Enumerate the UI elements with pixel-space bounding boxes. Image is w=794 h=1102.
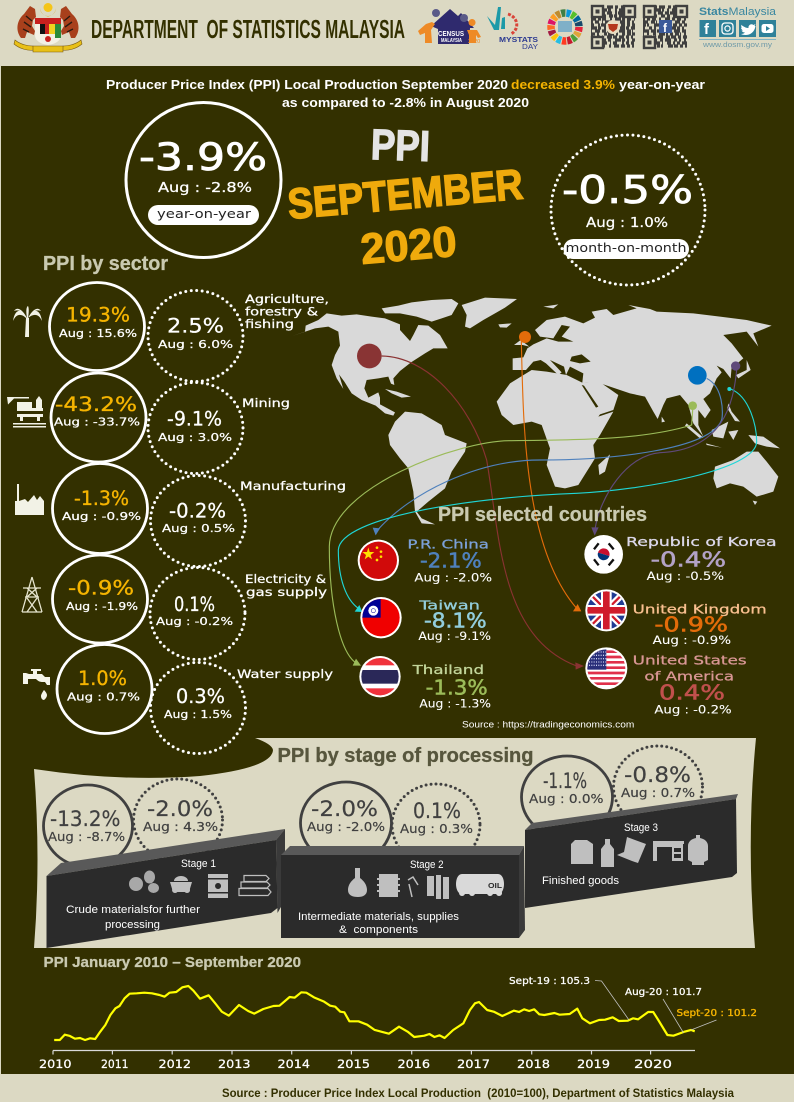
chart callouts: Sept-19 : 105.3 bbox=[509, 976, 590, 987]
stage 2 circles: Aug : 0.3% bbox=[400, 822, 473, 836]
sector: water supply: 0.3% bbox=[176, 685, 225, 708]
sector: agriculture: Aug : 6.0% bbox=[158, 338, 233, 351]
sector: mining bbox=[7, 373, 290, 474]
sector: agriculture bbox=[13, 282, 329, 382]
chart year labels: 2015 bbox=[337, 1057, 370, 1071]
country: Republic of Korea bbox=[584, 535, 777, 583]
chart axis bbox=[53, 1050, 695, 1054]
country: United States of America: United States bbox=[633, 654, 747, 668]
chart year labels: 2020 bbox=[634, 1057, 672, 1071]
icon: oil tanker bbox=[456, 874, 504, 896]
country connectors and markers bbox=[329, 331, 757, 670]
country: Thailand bbox=[359, 656, 491, 711]
chart callouts: Aug-20 : 101.7 bbox=[625, 987, 702, 998]
countries bbox=[357, 535, 777, 730]
summary text bbox=[106, 78, 705, 110]
month-on-month circle: month-on-month bbox=[566, 241, 686, 255]
icon: barrel bands bbox=[208, 878, 228, 894]
sector: agriculture: 19.3% bbox=[66, 304, 130, 327]
stage 3 circles bbox=[522, 746, 702, 838]
chart year labels: 2013 bbox=[218, 1057, 250, 1071]
icon: barrel bbox=[208, 874, 228, 898]
country: United Kingdom: -0.9% bbox=[654, 613, 728, 637]
country: Thailand: -1.3% bbox=[426, 675, 488, 699]
Old World islands bbox=[498, 304, 780, 475]
Africa and Arabia bbox=[497, 370, 618, 488]
world map: Australia bbox=[713, 452, 778, 505]
heading: PPI January 2010 - September 2020: PPI January 2010 – September 2020 bbox=[44, 954, 301, 971]
country: United States of America: Aug : -0.2% bbox=[654, 702, 732, 716]
StatsMalaysia social block: f bbox=[704, 21, 710, 38]
icon: logs bbox=[239, 876, 271, 896]
sector: manufacturing: -1.3% bbox=[74, 487, 129, 510]
world map: Americas bbox=[292, 298, 517, 524]
year-on-year circle bbox=[126, 102, 281, 258]
sector: mining: -9.1% bbox=[167, 408, 222, 431]
chart callouts: Sept-20 : 101.2 bbox=[676, 1008, 757, 1019]
sector: manufacturing: -0.2% bbox=[169, 500, 226, 523]
Eurasia bbox=[513, 305, 772, 437]
year-on-year circle: -3.9% bbox=[139, 136, 267, 179]
title: PPI September 2020 bbox=[286, 121, 525, 274]
connector: United Kingdom bbox=[519, 331, 581, 611]
icon: coat of arms of Malaysia bbox=[14, 3, 82, 52]
icon: MyStats Day logo bbox=[487, 7, 538, 51]
month-on-month circle bbox=[551, 135, 705, 285]
stage 3 circles: -0.8% bbox=[624, 763, 691, 787]
sector: mining: Mining bbox=[242, 396, 290, 410]
sector panel bbox=[7, 282, 346, 754]
icon: factory bbox=[15, 484, 44, 515]
icon: jerry can bbox=[571, 840, 593, 864]
sector: mining: Aug : 3.0% bbox=[158, 431, 232, 444]
header band bbox=[14, 3, 777, 52]
country: United States of America: 0.4% bbox=[659, 680, 725, 704]
heading: department name: DEPARTMENT OF STATISTICS MALAYSIA bbox=[91, 14, 405, 44]
icon: census 2020 logo bbox=[418, 9, 481, 45]
sector: electricity and gas: 0.1% bbox=[174, 593, 215, 616]
stage 2 block: Stage 2 bbox=[410, 859, 444, 871]
icon: SDG wheel bbox=[551, 13, 579, 41]
North America bbox=[292, 313, 448, 416]
stage 1 circles: -2.0% bbox=[147, 797, 213, 821]
stage 1 block bbox=[46, 829, 285, 948]
country: P.R. China: -2.1% bbox=[420, 548, 482, 572]
icon: desk bbox=[653, 841, 684, 861]
sector: agriculture: Agriculture, bbox=[245, 292, 329, 306]
icon: minerals bbox=[129, 870, 159, 893]
panel: stage of processing background bbox=[34, 738, 756, 948]
South America bbox=[388, 412, 467, 524]
sector: water supply: Aug : 1.5% bbox=[164, 708, 232, 721]
stage 1 circles bbox=[44, 779, 222, 867]
chart year labels: 2017 bbox=[457, 1057, 490, 1071]
summary text: decreased 3.9% bbox=[511, 78, 615, 92]
heading: PPI by sector: PPI by sector bbox=[43, 253, 168, 275]
country: Taiwan: -8.1% bbox=[424, 608, 487, 632]
connector: United States bbox=[357, 344, 584, 670]
heading: PPI selected countries: PPI selected countries bbox=[438, 504, 647, 526]
sector: electricity and gas: -0.9% bbox=[68, 576, 134, 599]
heading: PPI by stage of processing: PPI by stage of processing bbox=[278, 745, 534, 767]
stage 1 block: Stage 1 bbox=[181, 858, 216, 870]
summary text: Producer Price Index (PPI) Local Production September 2020 bbox=[106, 78, 508, 92]
connector: Korea bbox=[591, 361, 740, 536]
stage 3 block: Finished goods bbox=[542, 875, 620, 887]
connector: China bbox=[373, 366, 722, 535]
chart year labels: 2011 bbox=[101, 1057, 128, 1071]
Arctic islands, Greenland and Caribbean bbox=[382, 298, 517, 398]
chart series line bbox=[54, 986, 695, 1040]
chart year labels: 2019 bbox=[577, 1057, 610, 1071]
icon: chip bbox=[377, 874, 400, 897]
sector: electricity and gas: gas supply bbox=[246, 585, 327, 599]
StatsMalaysia social block bbox=[699, 6, 777, 49]
month-on-month circle: Aug : 1.0% bbox=[586, 215, 668, 231]
sector: water supply: Aug : 0.7% bbox=[67, 691, 140, 704]
country: P.R. China bbox=[357, 537, 492, 585]
chart year labels: 2012 bbox=[158, 1057, 191, 1071]
stage 1 block: Crude materialsfor further bbox=[66, 904, 200, 916]
sector: agriculture: Aug : 15.6% bbox=[59, 327, 137, 340]
stage 1 circles: Aug : 4.3% bbox=[143, 820, 218, 834]
stage 2 block: OIL bbox=[488, 881, 502, 890]
icon: water tap bbox=[23, 669, 50, 700]
icon: bottle bbox=[601, 839, 614, 867]
country: Thailand: Aug : -1.3% bbox=[419, 697, 491, 711]
country: United Kingdom: United Kingdom bbox=[633, 602, 767, 616]
sector: manufacturing: Aug : -0.9% bbox=[62, 510, 141, 523]
sector: electricity and gas: Aug : -1.9% bbox=[66, 600, 138, 613]
chart year labels: 2018 bbox=[517, 1057, 550, 1071]
StatsMalaysia social block: StatsMalaysia bbox=[699, 6, 777, 18]
sector: electricity and gas: Aug : -0.2% bbox=[156, 615, 233, 628]
stage 1 circles: Aug : -8.7% bbox=[48, 830, 125, 844]
summary text: as compared to -2.8% in August 2020 bbox=[282, 96, 529, 110]
chart year labels: 2010 bbox=[39, 1057, 72, 1071]
line chart: PPI 2010-2020 bbox=[39, 976, 757, 1071]
icon: MyStats Day logo: DAY bbox=[522, 42, 538, 51]
sector: manufacturing bbox=[15, 464, 346, 566]
country: Taiwan bbox=[360, 597, 491, 643]
title: PPI September 2020: PPI bbox=[370, 121, 431, 171]
chart year labels bbox=[39, 1057, 672, 1071]
stage 3 circles: Aug : 0.0% bbox=[529, 792, 604, 806]
sector: manufacturing: Aug : 0.5% bbox=[162, 522, 235, 535]
connector: Taiwan bbox=[338, 387, 757, 612]
sector: water supply bbox=[23, 644, 333, 754]
sector: mining: -43.2% bbox=[55, 393, 137, 416]
country: United Kingdom: Aug : -0.9% bbox=[653, 633, 731, 647]
sector: manufacturing: Manufacturing bbox=[240, 479, 346, 493]
country: Republic of Korea: Republic of Korea bbox=[626, 535, 777, 549]
icon: census 2020 logo: 2020 bbox=[468, 39, 480, 45]
stage 1 block: processing bbox=[105, 919, 160, 931]
icon: transmission tower bbox=[22, 577, 42, 612]
country: United States of America bbox=[585, 647, 747, 716]
icon: census 2020 logo: MALAYSIA bbox=[441, 38, 462, 44]
stage 3 block bbox=[525, 794, 738, 908]
stage 3 block: Stage 3 bbox=[624, 822, 658, 834]
source: trading economics: Source : https://tradingeconomics.com bbox=[462, 720, 635, 730]
country: Thailand: Thailand bbox=[411, 663, 484, 677]
chart callouts bbox=[509, 976, 757, 1033]
StatsMalaysia social block: www.dosm.gov.my bbox=[702, 40, 772, 49]
icon: MyStats Day logo: MYSTATS bbox=[499, 35, 538, 44]
icon: census 2020 logo: CENSUS bbox=[438, 29, 464, 38]
country: Taiwan: Aug : -9.1% bbox=[418, 629, 491, 643]
stage 2 circles: -2.0% bbox=[311, 797, 378, 821]
country: United States of America: of America bbox=[644, 670, 734, 684]
year-on-year circle: year-on-year bbox=[157, 207, 251, 221]
connector: Thailand bbox=[329, 401, 697, 666]
stage 2 block bbox=[281, 846, 525, 938]
icon: laptop bbox=[617, 837, 646, 863]
country: Republic of Korea: Aug : -0.5% bbox=[647, 569, 724, 583]
stage 2 circles: 0.1% bbox=[413, 799, 461, 823]
icon: QR finder marks website bbox=[592, 6, 635, 48]
icon: palm tree bbox=[13, 306, 42, 337]
title: PPI September 2020: 2020 bbox=[359, 218, 459, 274]
Black Sea and Red Sea bbox=[570, 354, 598, 408]
stage 2 circles: Aug : -2.0% bbox=[307, 820, 385, 834]
chart year labels: 2016 bbox=[398, 1057, 430, 1071]
sector: electricity and gas: Electricity & bbox=[245, 572, 326, 586]
chart year labels: 2014 bbox=[278, 1057, 310, 1071]
stage 2 circles bbox=[300, 782, 480, 866]
sector: agriculture: forestry & bbox=[245, 305, 318, 319]
month-on-month circle: -0.5% bbox=[562, 168, 693, 212]
sector: agriculture: fishing bbox=[245, 317, 294, 331]
year-on-year circle: Aug : -2.8% bbox=[158, 181, 252, 196]
stage 1 circles: -13.2% bbox=[50, 807, 120, 831]
country: P.R. China: P.R. China bbox=[407, 537, 489, 551]
sector: water supply: 1.0% bbox=[78, 667, 127, 690]
icon: gas cylinder bbox=[688, 835, 708, 865]
icon: QR finder marks facebook: f bbox=[663, 21, 668, 35]
sector: agriculture: 2.5% bbox=[167, 315, 224, 338]
icon: QR finder marks facebook bbox=[644, 6, 687, 48]
country: P.R. China: Aug : -2.0% bbox=[414, 571, 492, 585]
country: United Kingdom bbox=[585, 589, 767, 647]
title: PPI September 2020: SEPTEMBER bbox=[286, 161, 525, 229]
sector: water supply: Water supply bbox=[237, 667, 333, 681]
icon: QR code website bbox=[591, 7, 635, 46]
icon: planks bbox=[427, 875, 449, 899]
sector: mining: Aug : -33.7% bbox=[54, 416, 140, 429]
country: Republic of Korea: -0.4% bbox=[651, 548, 726, 572]
stage 3 circles: -1.1% bbox=[543, 769, 587, 793]
stage 2 block: & components bbox=[339, 924, 419, 936]
footer source: Source : Producer Price Index Local Production (2010=100), Department of Statistics Malaysia bbox=[222, 1088, 735, 1100]
summary text: year-on-year bbox=[619, 78, 705, 92]
stage 3 circles: Aug : 0.7% bbox=[621, 786, 695, 800]
icon: QR code facebook bbox=[643, 7, 687, 46]
sector: electricity and gas bbox=[22, 555, 327, 660]
icon: flask bbox=[348, 868, 367, 897]
icon: mine cart bbox=[170, 876, 192, 893]
icon: tools bbox=[408, 877, 418, 897]
stage 2 block: Intermediate materials, supplies bbox=[298, 911, 460, 923]
world map: Old World bbox=[497, 304, 780, 488]
country: Taiwan: Taiwan bbox=[418, 598, 480, 612]
icon: oil rig bbox=[7, 396, 46, 428]
